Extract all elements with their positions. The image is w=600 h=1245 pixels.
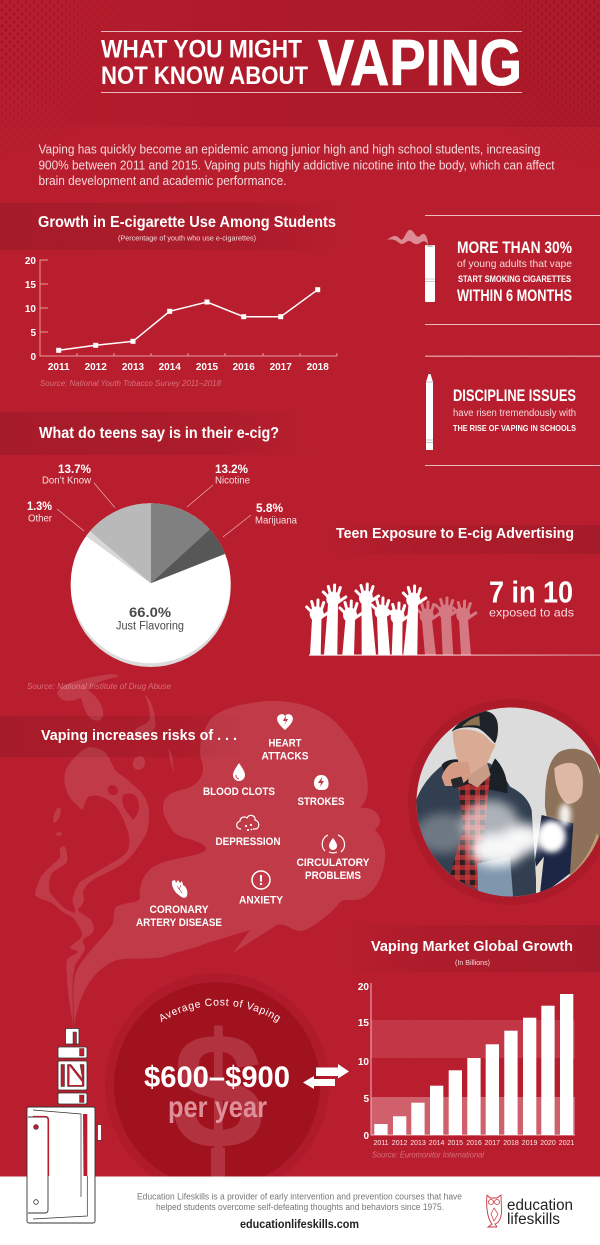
line chart: 20 bbox=[25, 256, 36, 267]
footer text: Education Lifeskills is a provider of early intervention and prevention courses that have bbox=[137, 1192, 462, 1202]
callout text: MORE THAN 30% bbox=[457, 239, 572, 257]
panel: discipline issues callout bbox=[425, 356, 600, 466]
title bbox=[101, 26, 522, 99]
pie labels and leader lines: 1.3% bbox=[27, 499, 52, 513]
risk: coronary artery disease: ARTERY DISEASE bbox=[136, 917, 222, 929]
heading: what do teens say: What do teens say is in their e-cig? bbox=[39, 425, 279, 442]
line chart: 2017 bbox=[270, 362, 292, 373]
risk: anxiety bbox=[239, 871, 284, 907]
icon: pen-shaped vape bbox=[426, 371, 433, 450]
footer text bbox=[137, 1192, 462, 1231]
line chart: 15 bbox=[25, 280, 36, 291]
line chart: 2012 bbox=[85, 362, 107, 373]
pie labels and leader lines: Nicotine bbox=[215, 476, 250, 486]
risk: circulatory problems: PROBLEMS bbox=[305, 870, 361, 882]
bar chart: 2018 bbox=[503, 1140, 519, 1147]
mouthpiece bbox=[66, 1028, 79, 1044]
heading: growth in e-cigarette use: Growth in E-cigarette Use Among Students bbox=[38, 214, 336, 231]
curved label: average cost: Average Cost of Vaping bbox=[160, 998, 280, 1023]
title: WHAT YOU MIGHT bbox=[101, 36, 302, 64]
risk: strokes: STROKES bbox=[298, 796, 344, 808]
risk: circulatory problems: CIRCULATORY bbox=[296, 857, 370, 869]
stat: 7 in 10: 7 in 10 bbox=[489, 575, 573, 610]
upper ring bbox=[58, 1047, 87, 1058]
pie labels and leader lines bbox=[27, 462, 297, 537]
source: youth tobacco survey: Source: National Youth Tobacco Survey 2011–2018 bbox=[40, 379, 222, 388]
intro text: brain development and academic performance. bbox=[38, 174, 286, 188]
logo: owl and wordmark: education bbox=[507, 1197, 573, 1214]
risk: blood clots bbox=[203, 763, 275, 798]
title: NOT KNOW ABOUT bbox=[101, 62, 308, 90]
logo: owl and wordmark: lifeskills bbox=[507, 1211, 560, 1228]
footer bbox=[0, 1176, 600, 1245]
risk: circulatory problems bbox=[296, 835, 370, 882]
battery body bbox=[27, 1107, 102, 1223]
bar chart: 2019 bbox=[522, 1140, 537, 1147]
icon: dollar sign: $ bbox=[172, 999, 264, 1183]
intro text: Vaping has quickly become an epidemic among junior high and high school students, increasing bbox=[38, 142, 541, 156]
risk: strokes bbox=[298, 775, 344, 808]
bar chart: 2013 bbox=[410, 1140, 426, 1147]
line chart: 2016 bbox=[233, 362, 255, 373]
bar chart: 2014 bbox=[429, 1140, 444, 1147]
risk: coronary artery disease: CORONARY bbox=[150, 904, 209, 916]
title: VAPING bbox=[318, 26, 522, 99]
panel: growth in e-cigarette use line chart bbox=[0, 203, 350, 388]
bar chart: 2017 bbox=[485, 1140, 500, 1147]
intro text: 900% between 2011 and 2015. Vaping puts highly addictive nicotine into the body, which can affect bbox=[38, 158, 555, 172]
heading: vaping increases risks: Vaping increases risks of . . . bbox=[41, 727, 237, 744]
risk: depression bbox=[216, 815, 281, 848]
pie chart bbox=[71, 503, 231, 667]
bar chart: 2012 bbox=[392, 1140, 407, 1147]
arrows: cost to market bbox=[303, 1064, 349, 1089]
stat: 7 in 10: exposed to ads bbox=[489, 606, 574, 620]
risk: depression: DEPRESSION bbox=[216, 836, 281, 848]
risk: coronary artery disease bbox=[136, 880, 222, 929]
source: national institute of drug abuse: Source: National Institute of Drug Abuse bbox=[27, 682, 172, 691]
bar chart: 2021 bbox=[559, 1140, 574, 1147]
risk: heart attacks: ATTACKS bbox=[262, 750, 308, 762]
panel: what teens say pie chart bbox=[0, 412, 310, 691]
icon: raised hands bbox=[307, 584, 600, 656]
bar chart: 20 bbox=[358, 982, 369, 993]
panel: vaping market global growth bar chart bbox=[340, 925, 600, 1160]
callout text bbox=[453, 387, 577, 433]
panel: vaping increases risks bbox=[0, 714, 370, 929]
pie labels and leader lines: Other bbox=[28, 514, 53, 524]
pie chart: 66.0% bbox=[129, 604, 172, 620]
risk: anxiety: ANXIETY bbox=[239, 895, 284, 907]
heading: market growth: Vaping Market Global Growth bbox=[371, 938, 573, 955]
source: euromonitor: Source: Euromonitor International bbox=[372, 1150, 484, 1160]
subheading: in billions: (In Billions) bbox=[455, 960, 490, 967]
pie labels and leader lines: Marijuana bbox=[255, 516, 297, 526]
line chart: 2011 bbox=[48, 362, 70, 373]
heading: teen exposure: Teen Exposure to E-cig Advertising bbox=[336, 525, 574, 542]
stat: dollars per year: $600–$900 bbox=[144, 1061, 290, 1094]
pie labels and leader lines: 13.2% bbox=[215, 462, 248, 476]
footer text: helped students overcome self-defeating thoughts and behaviors since 1975. bbox=[156, 1202, 444, 1213]
line chart: 0 bbox=[30, 352, 36, 363]
bar chart: 5 bbox=[363, 1094, 369, 1105]
logo: owl and wordmark bbox=[487, 1195, 573, 1228]
line chart: 5 bbox=[30, 328, 36, 339]
bar chart: 2016 bbox=[466, 1140, 482, 1147]
pie labels and leader lines: Don’t Know bbox=[42, 476, 92, 486]
bar chart bbox=[358, 982, 575, 1147]
pie chart: Just Flavoring bbox=[116, 620, 184, 632]
line chart: 10 bbox=[25, 304, 36, 315]
bar chart: 10 bbox=[358, 1057, 369, 1068]
line chart: 2018 bbox=[307, 362, 329, 373]
pie labels and leader lines: 5.8% bbox=[256, 501, 283, 515]
line chart: 2014 bbox=[159, 362, 181, 373]
callout text: have risen tremendously with bbox=[453, 408, 576, 419]
icon: vape device bbox=[27, 1028, 102, 1223]
lower ring bbox=[58, 1093, 87, 1104]
stat: dollars per year bbox=[144, 1061, 290, 1124]
callout text: THE RISE OF VAPING IN SCHOOLS bbox=[453, 424, 577, 433]
bar chart: 2011 bbox=[373, 1140, 389, 1147]
pie labels and leader lines: 13.7% bbox=[58, 462, 91, 476]
panel: more than 30 percent callout bbox=[387, 215, 600, 325]
bar chart: 2015 bbox=[448, 1140, 463, 1147]
photo: teens vaping in circular frame bbox=[408, 699, 600, 905]
line chart: 2013 bbox=[122, 362, 145, 373]
callout text: of young adults that vape bbox=[457, 258, 572, 270]
risk: heart attacks bbox=[262, 714, 308, 762]
risk: blood clots: BLOOD CLOTS bbox=[203, 786, 275, 798]
bar chart: 15 bbox=[358, 1018, 369, 1029]
panel: average cost of vaping bbox=[105, 973, 329, 1176]
intro text bbox=[38, 142, 555, 188]
bar chart: 2020 bbox=[540, 1140, 556, 1147]
risk: heart attacks: HEART bbox=[268, 738, 302, 750]
bar chart: 0 bbox=[363, 1131, 369, 1142]
tank bbox=[58, 1061, 87, 1090]
footer text: educationlifeskills.com bbox=[240, 1219, 359, 1231]
panel: teen exposure to advertising bbox=[307, 525, 600, 656]
subheading: percentage of youth: (Percentage of youth who use e-cigarettes) bbox=[118, 236, 256, 242]
line chart: 2015 bbox=[196, 362, 219, 373]
callout text bbox=[457, 239, 572, 305]
stat: dollars per year: per year bbox=[168, 1091, 267, 1124]
icon: cigarette with smoke bbox=[387, 230, 435, 302]
callout text: START SMOKING CIGARETTES bbox=[458, 274, 571, 284]
smoke cloud background bbox=[35, 674, 385, 1026]
line chart bbox=[25, 256, 337, 373]
